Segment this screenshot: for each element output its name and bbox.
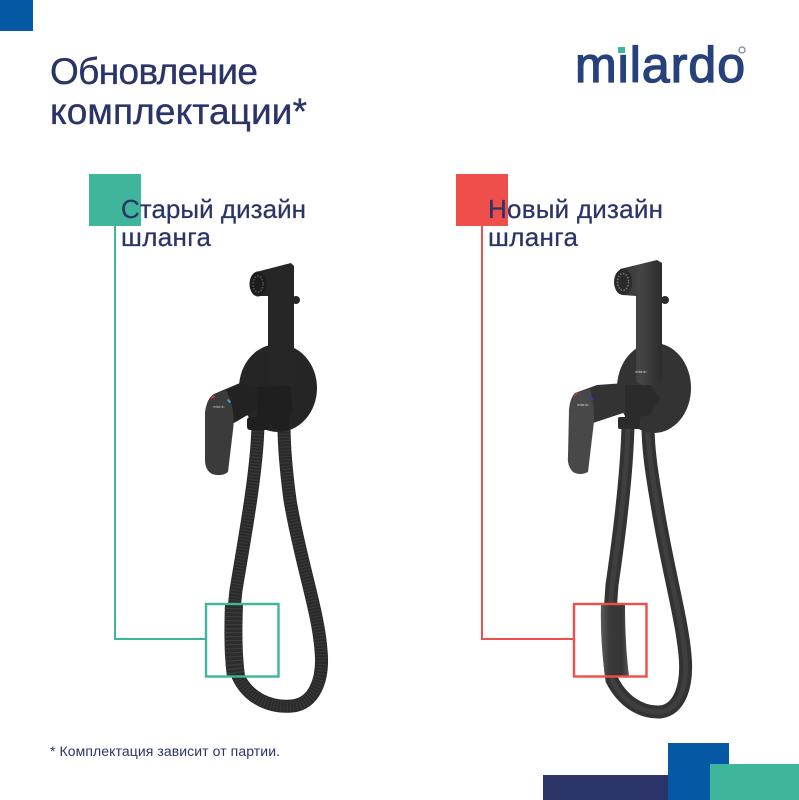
heading: new design: шланга — [488, 222, 579, 252]
heading: old design: Старый дизайн — [121, 194, 306, 224]
footnote: * Комплектация зависит от партии. — [50, 743, 280, 759]
wall plate — [239, 344, 317, 432]
spray head — [250, 263, 300, 390]
heading: new design: Новый дизайн — [488, 194, 663, 224]
mixer lever: milardo — [577, 403, 589, 407]
title: Обновление — [50, 51, 258, 92]
mixer lever — [568, 370, 647, 474]
panel: new hose design — [456, 174, 691, 712]
panel: old hose design — [89, 174, 322, 706]
highlight box: teal — [206, 604, 278, 676]
decorative corner square — [0, 0, 33, 31]
title: комплектации* — [50, 91, 307, 132]
marker square: red — [456, 174, 508, 226]
wall plate — [617, 343, 691, 433]
decorative bottom blocks — [543, 743, 799, 800]
logo: milardo: milardo — [575, 37, 745, 93]
ribbed hose — [233, 425, 322, 706]
product: faucet with ribbed hose — [205, 263, 322, 706]
smooth hose — [609, 425, 686, 712]
highlight box: red — [574, 604, 646, 676]
zoomed hose segment — [601, 604, 629, 676]
mixer lever — [205, 383, 258, 475]
heading: old design: шланга — [121, 222, 212, 252]
product: faucet with smooth hose — [568, 260, 691, 712]
marker square: teal — [89, 174, 141, 226]
holder and connectors — [247, 386, 293, 430]
mixer lever: milardo — [213, 405, 225, 409]
leader line: red — [482, 226, 573, 639]
leader line: teal — [115, 226, 205, 639]
spray head — [614, 260, 669, 386]
holder and connectors — [618, 385, 660, 429]
mixer lever: milardo — [635, 370, 647, 374]
